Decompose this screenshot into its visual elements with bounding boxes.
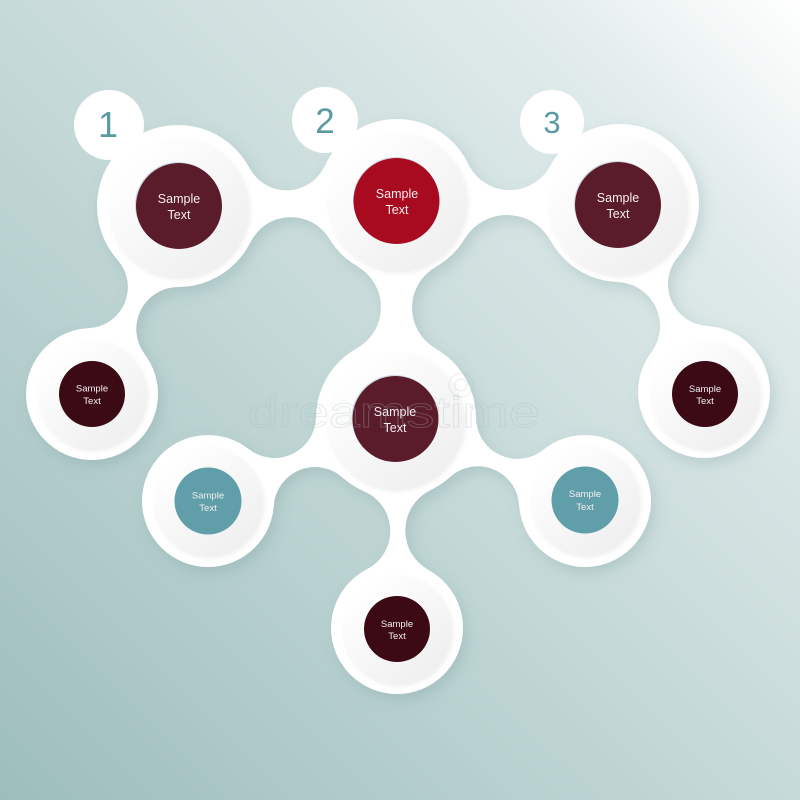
- left small node: Sample: [76, 384, 108, 394]
- badge 1: 1: [98, 104, 118, 145]
- bottom node: Sample: [381, 619, 413, 630]
- badge 3: 3: [543, 105, 561, 140]
- bottom-left teal node: Text: [199, 503, 217, 514]
- node 2: Sample: [376, 187, 418, 201]
- watermark: [248, 373, 540, 437]
- center node: [327, 352, 463, 488]
- badge 3: [520, 90, 584, 154]
- center node: Text: [384, 421, 407, 435]
- node 3: [549, 136, 687, 274]
- badge 2: 2: [315, 102, 335, 141]
- badge 1: [74, 90, 144, 160]
- right small node: Text: [696, 396, 714, 407]
- node 2: Text: [386, 203, 409, 217]
- bottom node: Text: [388, 631, 406, 642]
- node 1: Text: [168, 208, 191, 222]
- center node: Sample: [374, 405, 416, 419]
- watermark: dreamstime: [248, 388, 540, 437]
- bottom-right teal node: [531, 446, 639, 554]
- left small node: [38, 340, 146, 448]
- bottom node: [343, 575, 451, 683]
- left small node: Text: [83, 396, 101, 407]
- bottom-right teal node: Text: [576, 502, 594, 513]
- node 3: Text: [607, 207, 630, 221]
- bottom-right teal node: Sample: [569, 489, 601, 500]
- right small node: Sample: [689, 384, 721, 395]
- node 3: Sample: [597, 191, 639, 205]
- node 2: [328, 132, 466, 270]
- badge 2: [292, 87, 358, 153]
- right small node: [651, 340, 759, 448]
- white metaball network shape: [26, 119, 770, 694]
- node 1: Sample: [158, 192, 200, 206]
- bottom-left teal node: [154, 447, 262, 555]
- bottom-left teal node: Sample: [192, 490, 224, 502]
- node 1: [109, 138, 248, 276]
